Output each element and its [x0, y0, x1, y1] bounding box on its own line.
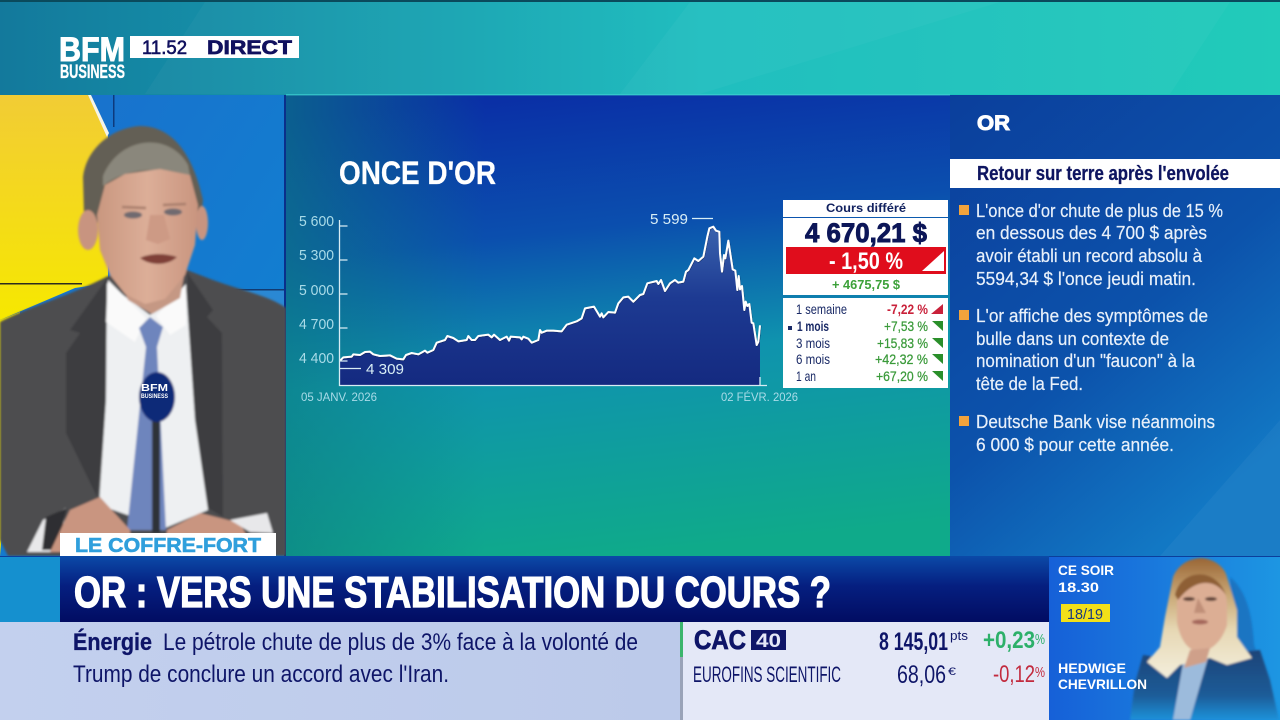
y axis labels: 5 600: [299, 213, 334, 230]
Eurofins row: 68,06: [897, 661, 946, 689]
news ticker: Énergie: [73, 628, 152, 656]
Eurofins row: €: [948, 666, 956, 678]
daily change in red: - 1,50 %: [829, 248, 903, 275]
min annotation: 4 309: [366, 361, 404, 378]
CAC 40 row: 40: [756, 631, 781, 652]
microphone: [152, 418, 160, 533]
news ticker: [0, 622, 682, 720]
performance table: 3 mois: [796, 335, 830, 351]
y axis labels: 4 400: [299, 350, 334, 367]
y axis labels: 5 000: [299, 282, 334, 299]
performance table: -7,22 %: [887, 301, 928, 317]
daily change in red: [786, 247, 946, 275]
market ticker: [680, 622, 1049, 720]
programme tag: LE COFFRE-FORT: [75, 535, 261, 557]
evening programme promo: CE SOIR: [1058, 562, 1114, 578]
left accent of title band: [0, 557, 60, 622]
quote heading: [783, 200, 948, 217]
Eurofins row: %: [1035, 664, 1045, 681]
x axis labels: [301, 389, 798, 404]
lapels: [66, 277, 108, 497]
clock and direct label: [130, 36, 299, 59]
Eurofins row: [693, 661, 1045, 689]
bullet 1: avoir établi un record absolu à: [976, 245, 1203, 266]
show badge: 18/19: [1067, 606, 1103, 623]
bullet 1: 5594,34 $ l'once jeudi matin.: [976, 268, 1196, 289]
x axis labels: 02 FÉVR. 2026: [721, 389, 798, 404]
CAC 40 row: +0,23: [983, 627, 1035, 654]
performance table: 1 semaine: [796, 301, 847, 317]
bullet 3: Deutsche Bank vise néanmoins: [976, 411, 1215, 432]
line chart: gold ounce price: [299, 211, 798, 404]
clock and direct label: DIRECT: [207, 38, 292, 59]
quote card: [783, 200, 948, 388]
BFM Business logo: BFM: [59, 31, 125, 69]
clock and direct label: 11.52: [142, 38, 187, 59]
panel topic: OR: [977, 112, 1010, 135]
bullet 1: L'once d'or chute de plus de 15 %: [976, 200, 1223, 221]
tie: [127, 317, 166, 530]
max annotation: 5 599: [650, 211, 688, 228]
evening programme promo: HEDWIGE: [1058, 660, 1126, 676]
min annotation: [340, 361, 404, 378]
studio photo: guest speaking: BUSINESS: [141, 394, 168, 400]
chart title: ONCE D'OR: [339, 155, 496, 191]
CAC 40 row: [694, 625, 1045, 656]
x axis labels: 05 JANV. 2026: [301, 390, 377, 404]
evening programme promo: [1049, 557, 1280, 720]
performance table: 6 mois: [796, 351, 830, 367]
bullet 3: 6 000 $ pour cette année.: [976, 434, 1174, 455]
performance table: +67,20 %: [876, 368, 928, 384]
presenter portrait: [1130, 558, 1279, 720]
evening programme promo: 18.30: [1058, 579, 1099, 595]
performance table: +42,32 %: [875, 351, 928, 367]
Eurofins row: -0,12: [993, 661, 1035, 688]
BFM Business logo: [59, 31, 125, 83]
right hand and cuff: [165, 512, 247, 533]
studio photo: guest speaking: [0, 95, 286, 556]
left hand and cuff: [27, 508, 66, 552]
bullet 2: bulle dans un contexte de: [976, 328, 1169, 349]
CAC 40 row: %: [1035, 631, 1045, 648]
current price: 4 670,21 $: [805, 218, 927, 248]
head: [83, 126, 203, 225]
performance table: +15,83 %: [877, 335, 928, 351]
y axis labels: [299, 213, 334, 367]
evening programme promo: CHEVRILLON: [1058, 676, 1147, 692]
quote heading: Cours différé: [826, 201, 906, 215]
jacket: [0, 270, 286, 556]
y axis labels: 4 700: [299, 316, 334, 333]
bullet 1: en dessous des 4 700 $ après: [976, 222, 1207, 243]
current price: [783, 218, 948, 295]
top banner: [0, 0, 1280, 95]
show badge: [1061, 604, 1110, 623]
bullet 3: [959, 411, 1215, 455]
bullet 1: [959, 200, 1223, 289]
Eurofins row: EUROFINS SCIENTIFIC: [693, 662, 841, 687]
bullet 2: nomination d'un "faucon" à la: [976, 350, 1196, 371]
bullet 2: [959, 305, 1208, 394]
absolute change: + 4675,75 $: [832, 277, 901, 292]
bullet 2: L'or affiche des symptômes de: [976, 305, 1208, 326]
axes and ticks: [340, 220, 767, 386]
CAC 40 row: CAC: [694, 625, 746, 655]
main title band: OR : VERS UNE STABILISATION DU COURS ?: [74, 568, 831, 617]
bullet 2: tête de la Fed.: [976, 373, 1083, 394]
BFM Business logo: BUSINESS: [60, 62, 125, 83]
studio photo: guest speaking: BFM: [141, 383, 168, 394]
performance table: 1 mois: [797, 318, 829, 334]
news ticker: Trump de conclure un accord avec l'Iran.: [73, 661, 449, 688]
performance table: +7,53 %: [884, 318, 928, 334]
performance table: 1 an: [796, 368, 816, 384]
shirt: [99, 283, 208, 528]
y axis labels: 5 300: [299, 247, 334, 264]
area and price line: [340, 227, 760, 385]
neck: [125, 276, 186, 314]
max annotation: [650, 211, 713, 228]
CAC 40 row: 8 145,01: [879, 628, 948, 656]
performance table: [783, 298, 948, 388]
news ticker: Le pétrole chute de plus de 3% face à la volonté de: [163, 629, 638, 656]
panel headline: Retour sur terre après l'envolée: [977, 162, 1229, 185]
right panel: key points: [950, 95, 1280, 556]
chart panel background: [286, 94, 950, 556]
CAC 40 row: pts: [950, 628, 969, 643]
